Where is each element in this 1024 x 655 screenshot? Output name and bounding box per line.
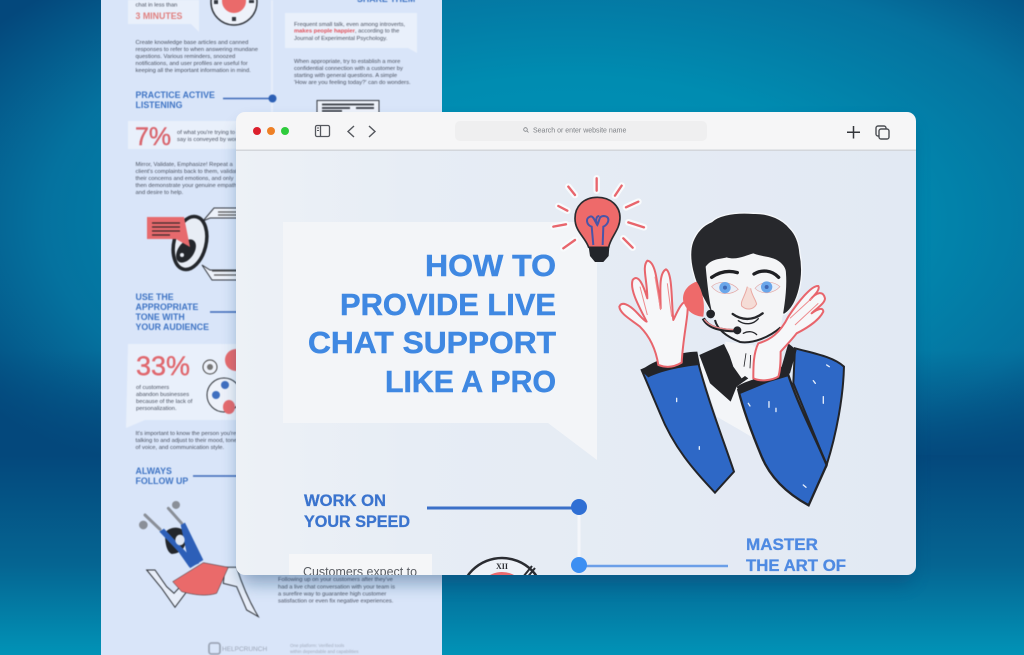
callout: 3 minutes: 3 MINUTES [136, 11, 183, 21]
text block: know the person: talking to and adjust to their mood, tone [136, 438, 237, 444]
text block: mirror validate emphasize: and desire to help. [136, 190, 184, 196]
callout: 33 percent: abandon businesses [136, 392, 189, 398]
callout: 33 percent: 33% [136, 351, 190, 381]
icon: sidebar [316, 126, 330, 136]
title: LIKE A PRO [385, 364, 556, 399]
heading: master the art of: THE ART OF [746, 556, 846, 575]
icon: light bulb [553, 178, 644, 262]
text block: canned responses: responses to refer to when answering mundane [136, 47, 258, 53]
back right sleeve [793, 348, 844, 465]
footer note [290, 643, 359, 654]
right hand finger lines [790, 298, 818, 325]
text block: canned responses: notifications, and user profiles are useful for [136, 61, 248, 67]
panel: browser window [236, 112, 916, 575]
callout: 7 percent: 7% [135, 123, 171, 151]
left cuff [641, 352, 700, 377]
eyebrows [712, 271, 779, 277]
icon: new tab [847, 126, 860, 138]
callout: small talk [285, 13, 417, 53]
heading: use the appropriate tone: APPROPRIATE [136, 302, 199, 312]
text block: mirror validate emphasize: Mirror, Validate, Emphasize! Repeat a [136, 162, 233, 168]
address bar [523, 127, 626, 133]
heading: practice active listening: LISTENING [136, 100, 183, 110]
jacket highlights [677, 365, 829, 487]
face [706, 253, 786, 342]
text block: canned responses: questions. Various reminders, snoozed [136, 54, 235, 60]
speech bubble with title [283, 222, 597, 460]
callout: 3 minutes: chat in less than [136, 2, 177, 8]
headset earcup [683, 282, 704, 317]
callout: 33 percent: of customers [136, 385, 169, 391]
left hand [619, 261, 688, 367]
title: HOW TO [425, 248, 556, 283]
text block: mirror validate emphasize: their concerns and emotions, and only [136, 176, 234, 182]
shirt and neck [698, 344, 756, 438]
neck [725, 342, 753, 378]
callout: 7 percent [128, 121, 236, 149]
footer note: One platform: Verified tools [290, 643, 345, 648]
footer note: within dependable and capabilities [290, 649, 359, 654]
icon: ear with speech bubbles [147, 208, 250, 280]
panel: infographic poster behind browser [99, 0, 444, 655]
icon: document [316, 99, 380, 112]
text block: following up: Following up on your customers after they've [278, 577, 393, 583]
heading: use the appropriate tone [136, 292, 240, 332]
text block: mirror validate emphasize [136, 162, 240, 196]
heading: use the appropriate tone: TONE WITH [136, 312, 185, 322]
heading: use the appropriate tone: YOUR AUDIENCE [136, 322, 209, 332]
text block: confidential connection: confidential connection with a customer by [294, 66, 403, 72]
heading: work on your speed: YOUR SPEED [304, 512, 410, 531]
heading: work on your speed [304, 491, 410, 531]
icon: back and forward [348, 126, 375, 137]
logo: helpcrunch: HELPCRUNCH [222, 646, 267, 653]
text block: following up [278, 577, 395, 604]
title [308, 248, 556, 399]
logo: helpcrunch [209, 643, 267, 654]
callout: small talk: Frequent small talk, even among introverts, [294, 22, 406, 28]
right hand [753, 286, 825, 380]
text block: following up: a surefire way to guarantee high customer [278, 592, 386, 598]
heading: practice active listening [136, 90, 276, 110]
callout: 7 percent: say is conveyed by words [177, 137, 243, 143]
illustration: support agent with headset [619, 213, 844, 505]
nose [741, 287, 757, 309]
text block: mirror validate emphasize: client's complaints back to them, validate [136, 169, 240, 175]
icon: clock: XII [496, 562, 508, 571]
mouth [733, 313, 763, 335]
text block: confidential connection: starting with general questions. A simple [294, 73, 397, 79]
headset microphone [703, 310, 741, 334]
callout: 33 percent [126, 344, 236, 428]
hair [691, 213, 802, 317]
connector: master node [571, 557, 728, 573]
heading: always follow up [135, 466, 236, 485]
text block: confidential connection: When appropriate, try to establish a more [294, 59, 400, 65]
text block: canned responses: Create knowledge base articles and canned [136, 40, 248, 46]
illustration: jumping woman [139, 501, 258, 617]
heading: use the appropriate tone: USE THE [136, 292, 174, 302]
connector: speed node [427, 499, 587, 558]
title: PROVIDE LIVE [340, 287, 556, 322]
eyes [712, 281, 780, 294]
text block: mirror validate emphasize: then demonstrate your genuine empathy [136, 183, 240, 189]
heading: work on your speed: WORK ON [304, 491, 386, 510]
address bar: Search or enter website name [533, 128, 626, 134]
window controls [253, 127, 289, 135]
heading: always follow up: FOLLOW UP [136, 476, 188, 486]
callout: small talk: Journal of Experimental Psychology. [294, 36, 388, 42]
text block: following up: had a live chat conversation with your team is [278, 584, 395, 590]
text block: canned responses [136, 40, 258, 74]
browser toolbar [236, 112, 916, 151]
text block: canned responses: keeping all the important information in mind. [136, 68, 251, 74]
callout: 33 percent: personalization. [136, 406, 177, 412]
callout: customers expect: Customers expect to [303, 564, 417, 579]
icon: clock top [211, 0, 257, 25]
callout: 3 minutes [128, 0, 199, 32]
front right sleeve [738, 375, 827, 505]
callout: small talk: makes people happier, according to the [294, 28, 399, 34]
text block: know the person: of voice, and communication style. [136, 445, 224, 451]
callout: 33 percent: because of the lack of [136, 399, 193, 405]
left hand finger lines [640, 277, 672, 317]
browser shadow [240, 125, 912, 583]
text block: confidential connection: 'How are you feeling today?' can do wonders. [294, 80, 411, 86]
icon: tabs [876, 126, 889, 139]
right cuff [737, 343, 797, 394]
callout: 7 percent: of what you're trying to [177, 130, 235, 136]
heading: always follow up: ALWAYS [136, 466, 172, 476]
text block: know the person [136, 431, 237, 451]
heading: practice active listening: PRACTICE ACTIVE [136, 90, 215, 100]
heading: master the art of: MASTER [746, 535, 818, 554]
jaw line [715, 320, 781, 342]
heading: master the art of [746, 535, 846, 575]
text block: know the person: It's important to know the person you're [136, 431, 236, 437]
left sleeve [642, 357, 734, 493]
text block: following up: satisfaction or even fix negative experiences. [278, 598, 394, 604]
callout: customers expect [289, 554, 432, 579]
collar [699, 344, 748, 402]
icon: clock [460, 558, 544, 642]
text block: confidential connection [294, 59, 411, 86]
title: CHAT SUPPORT [308, 325, 556, 360]
